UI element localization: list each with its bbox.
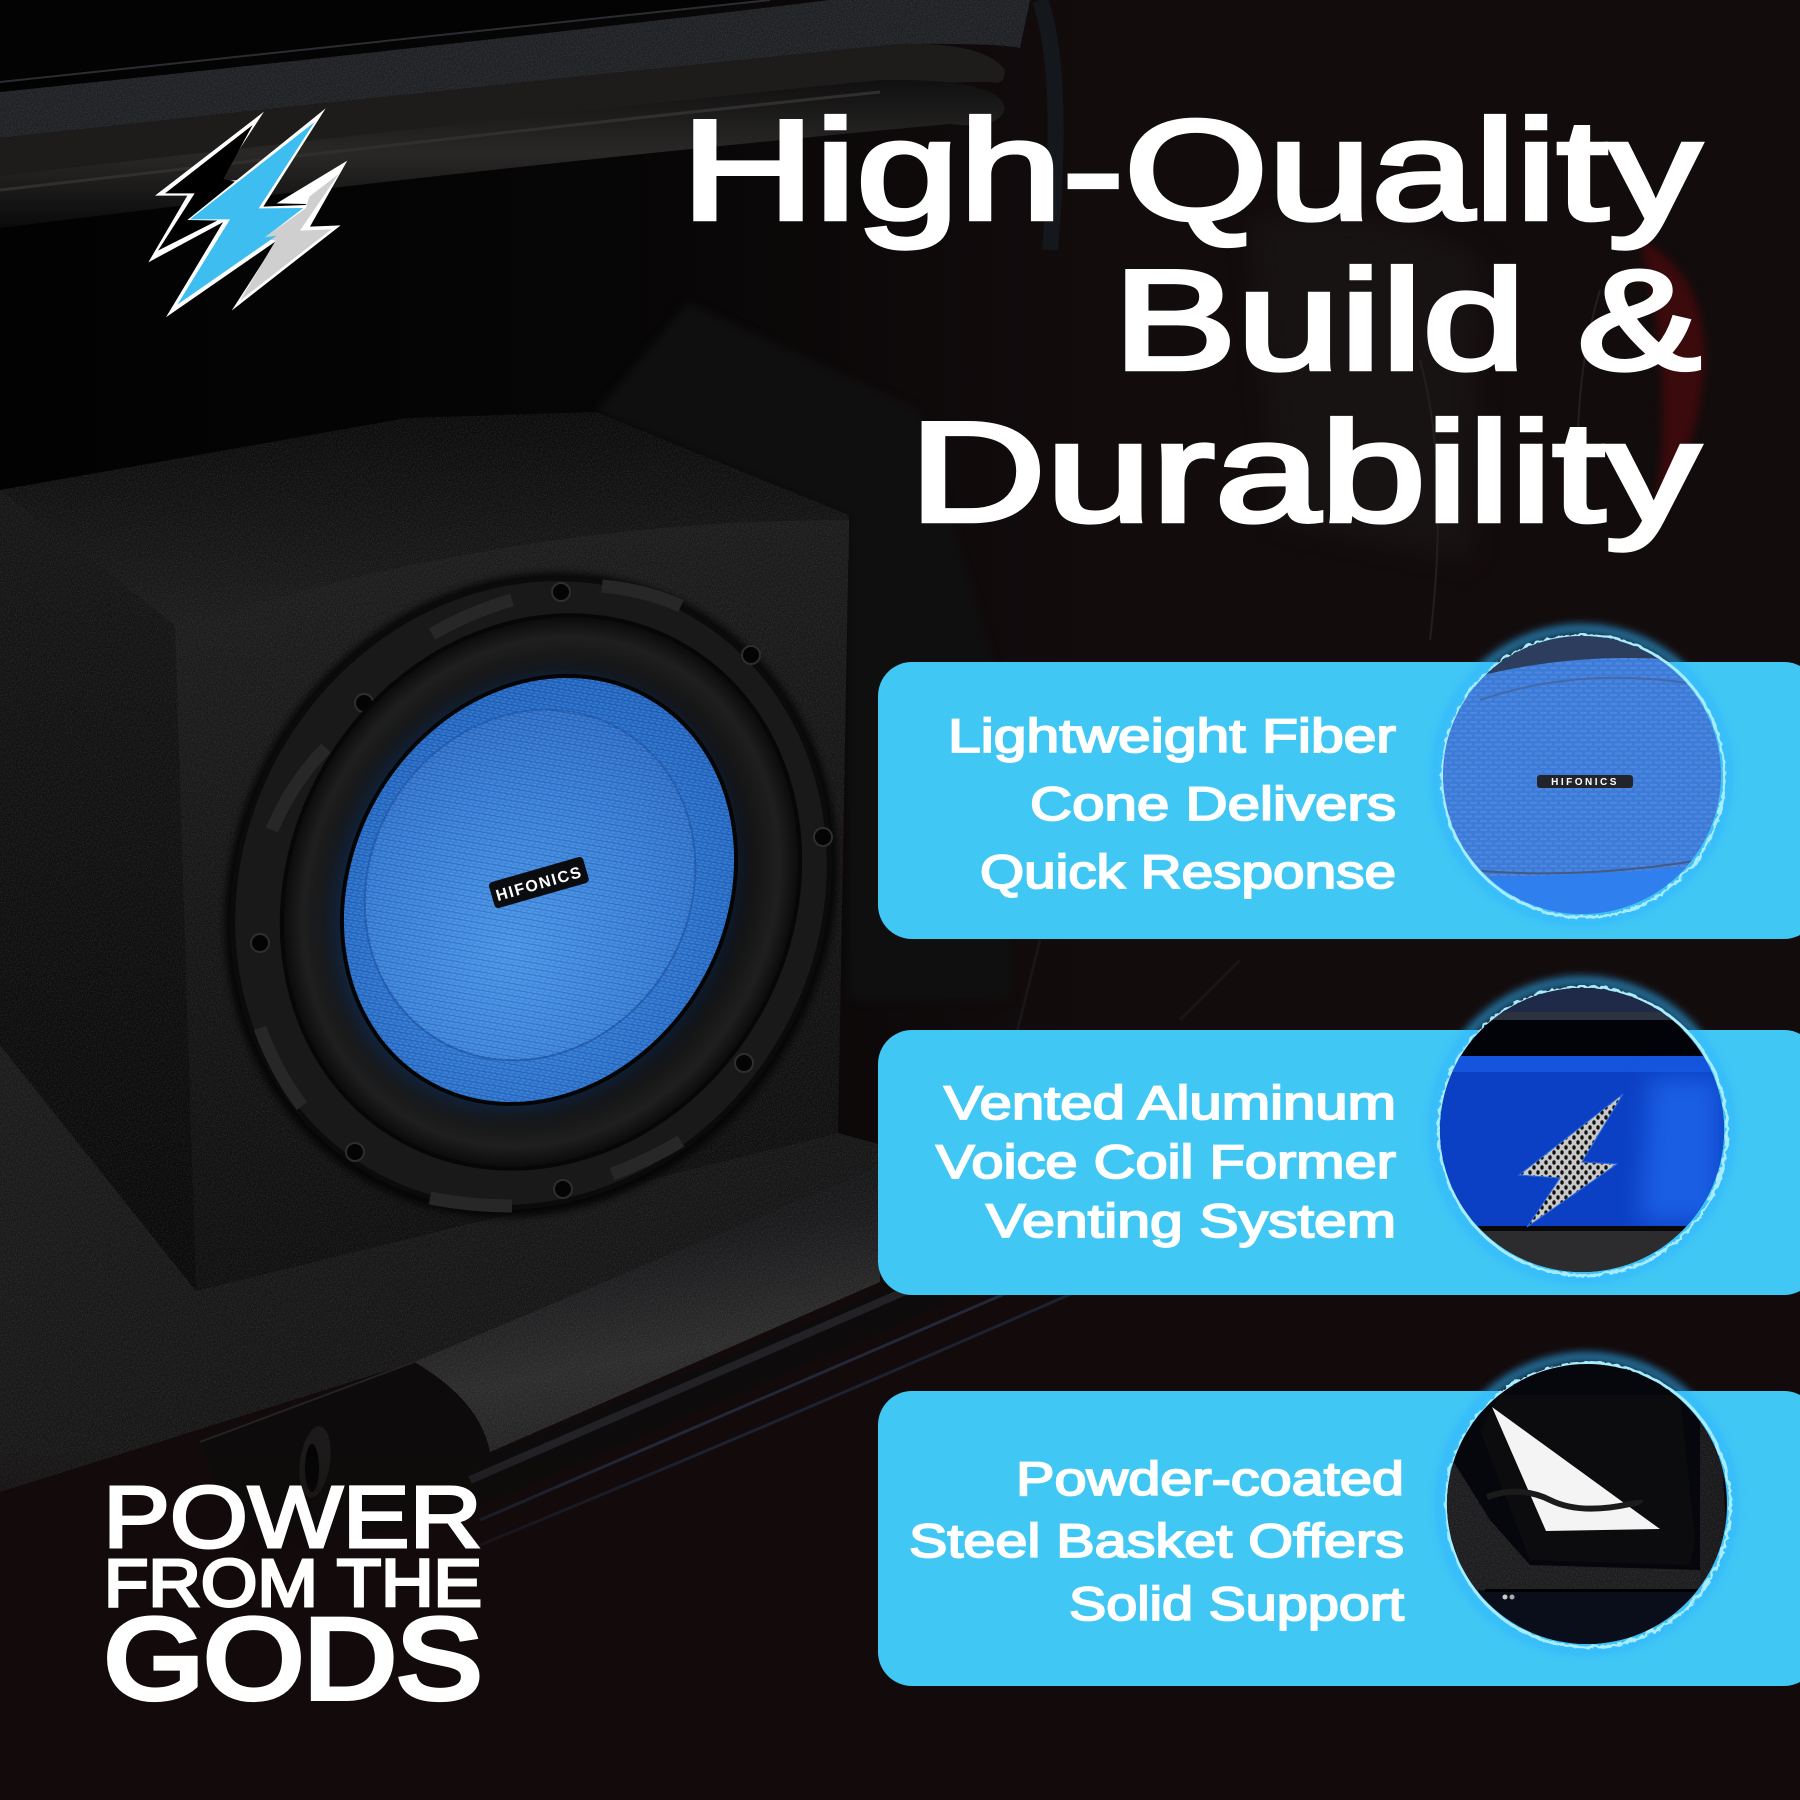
panel text: Cone Delivers [1030, 777, 1396, 830]
panel text [936, 1076, 1396, 1247]
rubber surround [182, 520, 900, 1264]
mounting frame [119, 469, 943, 1317]
panel text: Quick Response [980, 845, 1396, 898]
door frame bands [0, 0, 1030, 138]
blue glow [257, 603, 813, 1183]
voice coil close-up photo [1440, 988, 1724, 1272]
brand badge [488, 856, 590, 909]
panel text: Lightweight Fiber [948, 709, 1396, 762]
panel text [909, 1452, 1404, 1630]
title [681, 91, 1701, 552]
title: High-Quality [681, 91, 1701, 250]
scuff plate [414, 1166, 880, 1452]
speaker shadow [108, 460, 954, 1330]
tagline: Power From The Gods: GODS [104, 1596, 482, 1723]
blue bolt outline [166, 108, 326, 317]
right door and tail light area [1000, 215, 1705, 1100]
frame tabs [260, 586, 681, 1206]
tagline: Power From The Gods: POWER [103, 1469, 482, 1566]
tagline: Power From The Gods [103, 1469, 482, 1723]
gray bolt fill [240, 174, 339, 301]
subwoofer enclosure top face [0, 412, 849, 630]
panel text: Powder-coated [1016, 1452, 1404, 1505]
dust cap [301, 649, 759, 1121]
panel text: Venting System [986, 1194, 1396, 1247]
glow ring [1433, 981, 1731, 1279]
sill trim and bolt [200, 1250, 1080, 1560]
icon: triple lightning bolt logo [148, 108, 347, 317]
panel text [948, 709, 1396, 898]
panel text: Voice Coil Former [936, 1135, 1396, 1188]
panel text: Steel Basket Offers [909, 1514, 1404, 1567]
tagline: Power From The Gods: FROM THE [104, 1546, 482, 1621]
rear shelf wall [596, 303, 1010, 1000]
panel text: Solid Support [1069, 1577, 1404, 1630]
title: Durability [909, 393, 1700, 552]
cone badge [1537, 775, 1633, 788]
fiber cone [265, 604, 813, 1176]
subwoofer enclosure side face [0, 490, 196, 1291]
mesh bolt [1519, 1094, 1623, 1227]
title: Build & [1113, 241, 1701, 400]
carpet floor [0, 1045, 900, 1492]
panel: fiber cone [878, 629, 1800, 939]
top window black area [0, 0, 760, 80]
basket close-up photo [1440, 1360, 1740, 1650]
cone badge: HIFONICS [1551, 777, 1619, 788]
white triangle [1492, 1407, 1660, 1531]
panel: steel basket [878, 1357, 1800, 1686]
glow ring [1440, 1357, 1734, 1651]
glow ring [1436, 629, 1728, 921]
black bolt [148, 112, 264, 262]
blue bolt fill [177, 122, 315, 305]
cone close-up photo [1443, 636, 1721, 914]
gray bolt outline [232, 161, 347, 311]
brand badge: HIFONICS [494, 864, 585, 905]
mounting screws [251, 583, 832, 1198]
panel text: Vented Aluminum [944, 1076, 1396, 1129]
subwoofer speaker [108, 460, 954, 1330]
subwoofer enclosure front face [175, 520, 849, 1291]
panel: voice coil [878, 980, 1800, 1295]
